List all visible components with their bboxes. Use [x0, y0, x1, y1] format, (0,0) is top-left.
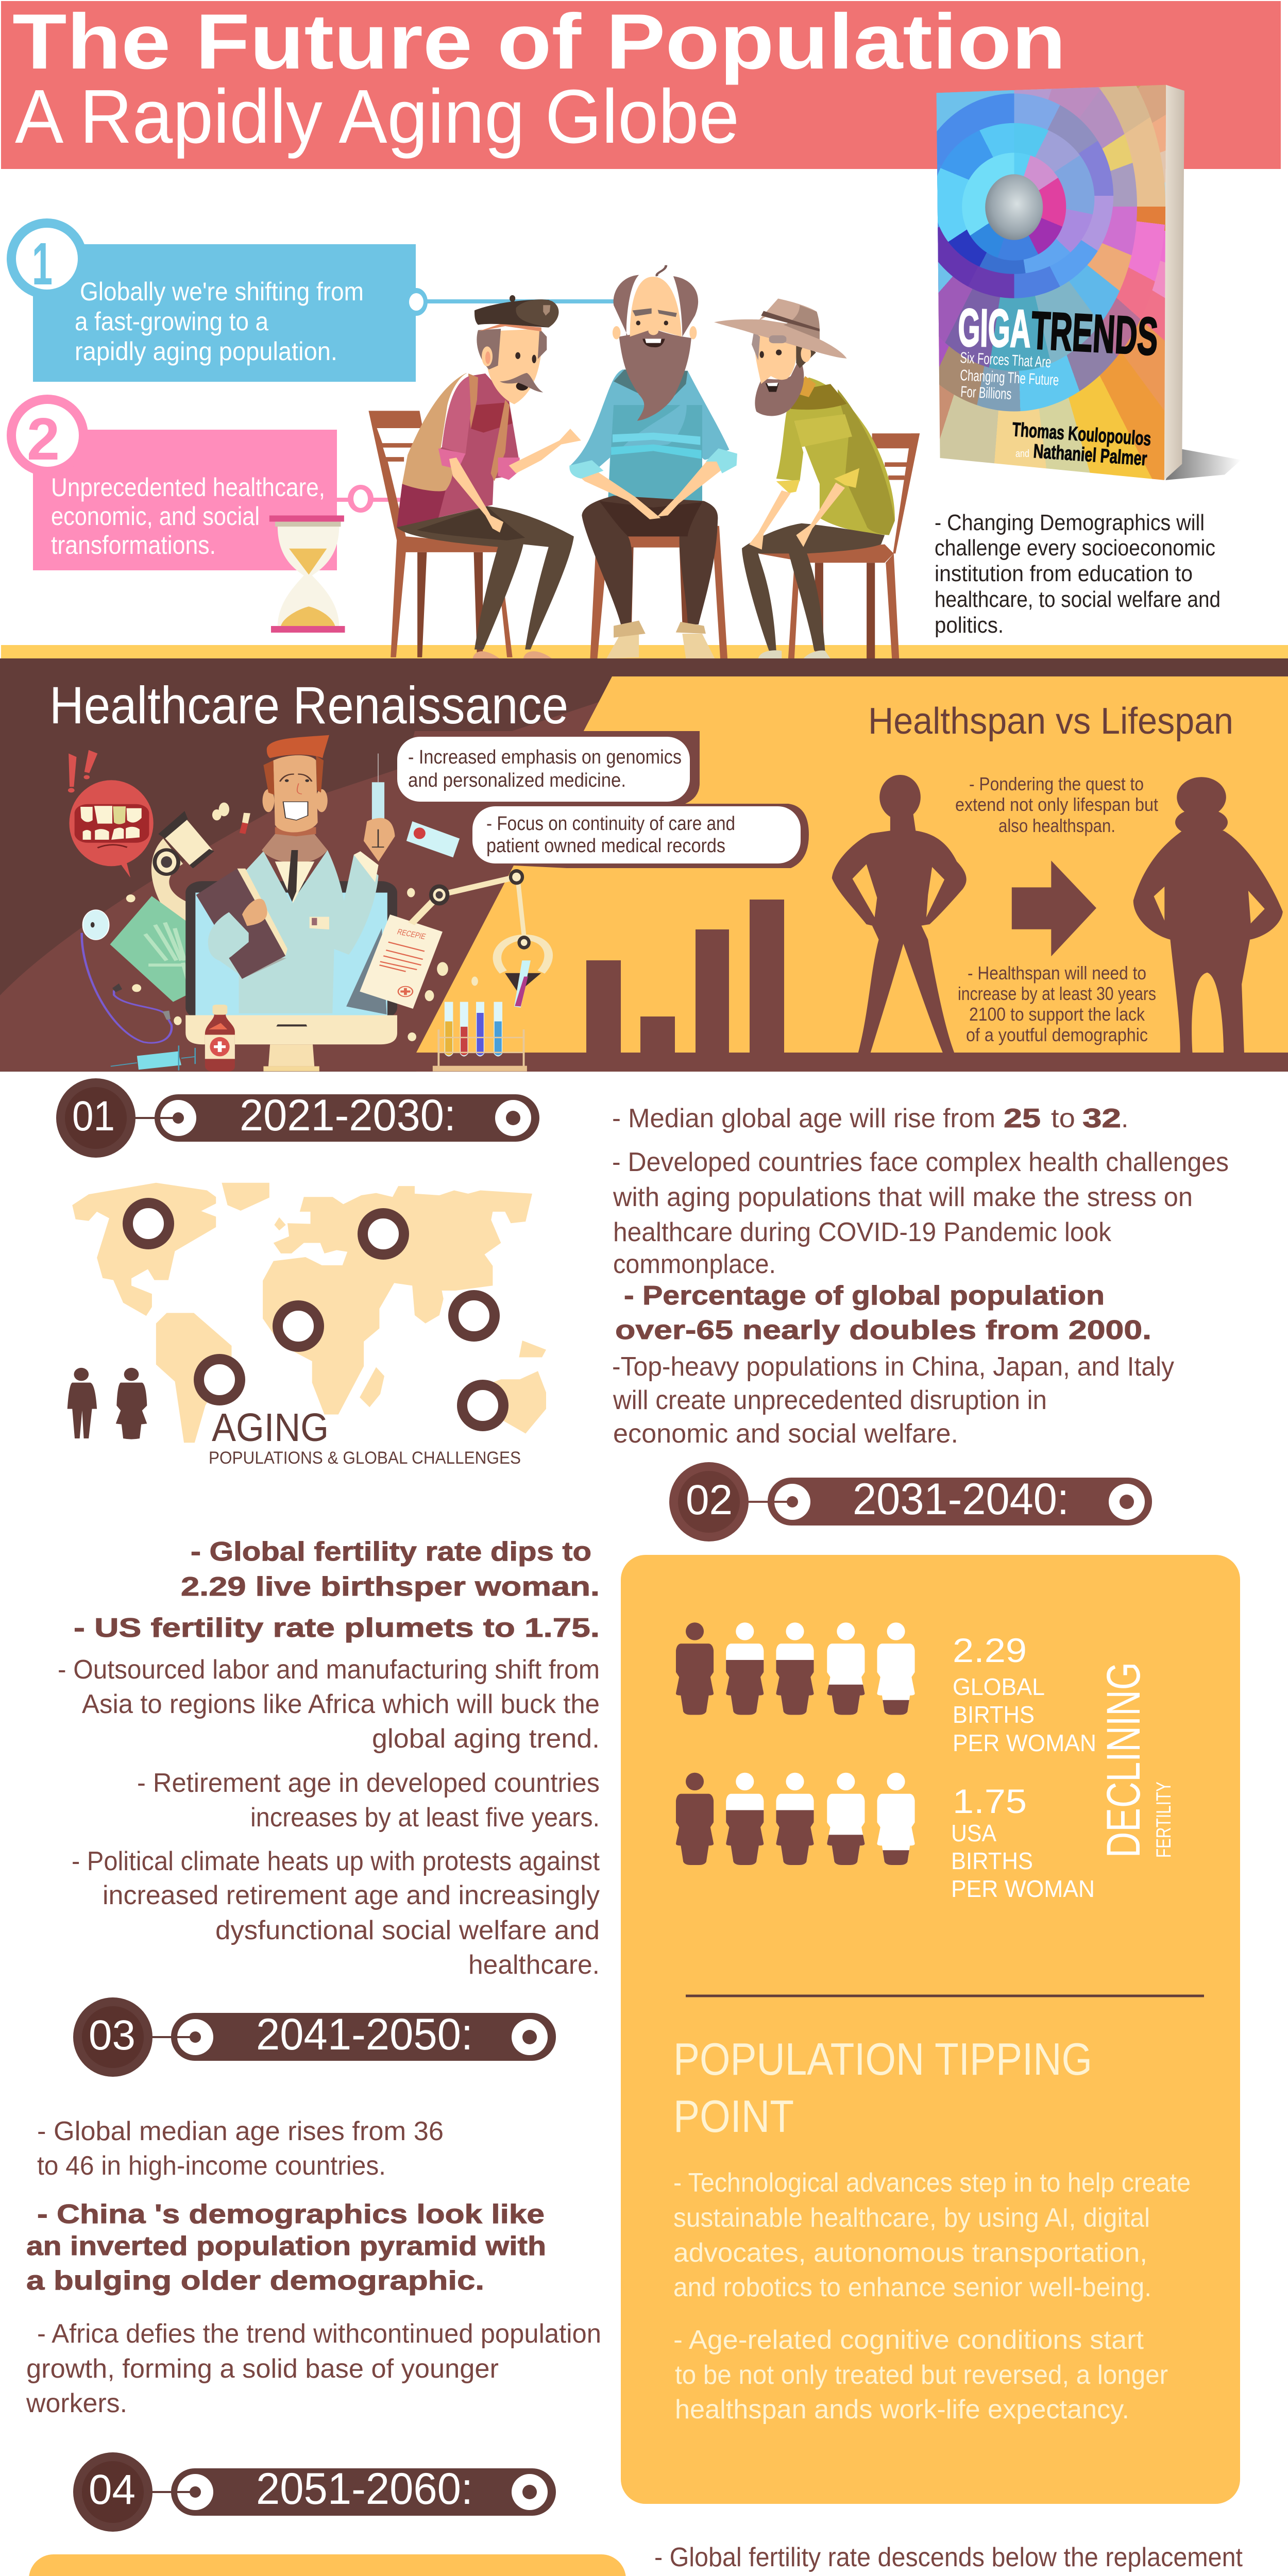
illustration: doctor in monitor [68, 735, 549, 1071]
text block: 2031-2040 [58, 1537, 600, 1980]
header banner [1, 0, 1281, 169]
text block: 2021-2030: commonplace. [613, 1249, 776, 1279]
book title text: Changing The Future [960, 367, 1059, 389]
man with long beard [569, 265, 737, 658]
title: The Future of Population [12, 0, 1066, 86]
icon: prescription paper [360, 914, 443, 1009]
book title text: Thomas Koulopoulos [1011, 419, 1152, 450]
icon: tooth speech bubble [68, 750, 154, 878]
label: aging [209, 1405, 521, 1468]
man with beret [397, 295, 581, 658]
text block: 2021-2030: - Developed countries face complex health challenges [612, 1147, 1229, 1177]
note beside book: healthcare, to social welfare and [935, 587, 1221, 612]
text block: 2041-2050: - Global median age rises from 36 [37, 2116, 444, 2146]
text: tipping point details: advocates, autonomous transportation, [673, 2238, 1147, 2268]
text block: 2031-2040: 2.29 live birthsper woman. [181, 1572, 600, 1602]
text block: 2041-2050: - Africa defies the trend withcontinued population [37, 2319, 601, 2349]
timeline header 02 [669, 1462, 1152, 1541]
book title text: TRENDS [1030, 300, 1160, 366]
text block: 2021-2030: healthcare during COVID-19 Pandemic look [613, 1217, 1112, 1247]
text block: 2021-2030: -Top-heavy populations in China, Japan, and Italy [612, 1352, 1174, 1382]
stat: 2.29 global: GLOBAL [953, 1673, 1045, 1700]
stat: 2.29 global: 2.29 [953, 1631, 1027, 1669]
text block: 2021-2030: 25 [1004, 1104, 1041, 1133]
text block: 2031-2040: - US fertility rate plumets to 1.75. [74, 1613, 600, 1643]
note beside book: politics. [935, 613, 1004, 638]
callout 1: blue: a fast-growing to a [75, 307, 268, 336]
timeline header 01: 01 [72, 1093, 115, 1140]
callout 1: blue: rapidly aging population. [75, 337, 337, 366]
heading: population tipping point [673, 2033, 1092, 2142]
text block: 2031-2040: increases by at least five years. [250, 1803, 600, 1833]
text block: 2041-2050: workers. [26, 2388, 127, 2418]
heading: healthspan vs lifespan: Healthspan vs Lifespan [868, 701, 1233, 742]
note beside book: challenge every socioeconomic [935, 535, 1215, 561]
speech bubble 1: - Increased emphasis on genomics [408, 747, 682, 768]
text block: 2051-2060: - Global fertility rate descends below the replacement [654, 2543, 1243, 2572]
book title text: and [1015, 448, 1029, 460]
text: pondering: extend not only lifespan but [955, 794, 1158, 815]
subtitle: A Rapidly Aging Globe [15, 74, 739, 159]
text block: 2041-2050: to 46 in high-income countries. [37, 2151, 386, 2181]
icon: prescription paper: RECEPIE [396, 927, 427, 941]
callout 2: pink [11, 399, 401, 570]
timeline header 01: 2021-2030: [240, 1091, 456, 1140]
label: aging: POPULATIONS & GLOBAL CHALLENGES [209, 1448, 521, 1468]
text block: 2031-2040: - Global fertility rate dips to [191, 1537, 591, 1567]
icon: pills [126, 803, 478, 1041]
book title text: Nathaniel Palmer [1032, 440, 1148, 470]
timeline header 03: 2041-2050: [256, 2010, 473, 2059]
icon: test tubes [433, 1002, 527, 1071]
timeline header 04 [73, 2452, 556, 2532]
stat: 1.75 usa [951, 1782, 1095, 1902]
text: tipping point details: - Age-related cognitive conditions start [673, 2325, 1144, 2355]
text block: 2021-2030: to [1051, 1104, 1075, 1133]
x-ray [110, 896, 196, 1002]
callout 2: pink: Unprecedented healthcare, [51, 473, 325, 502]
rotated label: fertility: FERTILITY [1153, 1782, 1175, 1858]
speech bubble 1: and personalized medicine. [408, 770, 626, 791]
icon: hourglass [269, 515, 345, 633]
panel: healthcare renaissance [0, 658, 1288, 1072]
text block: 2021-2030: over-65 nearly doubles from 2000. [615, 1315, 1151, 1345]
text: healthspan increase [958, 962, 1156, 1045]
text block: 2031-2040: global aging trend. [372, 1724, 600, 1754]
text block: 2021-2030: economic and social welfare. [613, 1419, 958, 1449]
yellow floor band [1, 645, 1288, 658]
text: healthspan increase: - Healthspan will need to [968, 962, 1146, 984]
callout 1: blue: Globally we're shifting from [80, 277, 364, 306]
note beside book [935, 510, 1221, 638]
note beside book: - Changing Demographics will [935, 510, 1205, 535]
text block: 2031-2040: Asia to regions like Africa which will buck the [82, 1689, 600, 1719]
text: healthspan increase: increase by at least 30 years [958, 983, 1156, 1004]
callout 2: pink: transformations. [51, 531, 216, 560]
left chair [368, 411, 513, 657]
speech bubble 2 [472, 804, 809, 868]
text block: 2021-2030: will create unprecedented disruption in [613, 1385, 1047, 1415]
icon: stethoscope [82, 910, 172, 1043]
text block: 2031-2040: healthcare. [468, 1950, 600, 1980]
text: tipping point details: - Technological advances step in to help create [673, 2168, 1191, 2198]
rotated label: declining: DECLINING [1097, 1662, 1150, 1858]
stat: 2.29 global: BIRTHS [953, 1701, 1035, 1728]
text block: 2041-2050: - China 's demographics look like [37, 2199, 545, 2229]
timeline header 01 [56, 1078, 539, 1158]
text: tipping point details: healthspan ands work-life expectancy. [675, 2395, 1129, 2425]
speech bubble 1 [397, 731, 700, 804]
timeline header 04: 04 [89, 2466, 135, 2513]
stat: 1.75 usa: PER WOMAN [951, 1875, 1095, 1902]
heading: population tipping point: POPULATION TIPPING [673, 2033, 1092, 2084]
book title text [958, 298, 1160, 470]
text block: 2041-2050: an inverted population pyramid with [26, 2231, 546, 2261]
text: tipping point details: and robotics to enhance senior well-being. [673, 2273, 1151, 2302]
man with hat [714, 298, 895, 658]
timeline header 03 [73, 1997, 556, 2077]
icon: syringe [111, 1045, 195, 1071]
silhouettes and arrow [832, 775, 1283, 1053]
text: tipping point details [673, 2168, 1191, 2425]
speech bubble 2: - Focus on continuity of care and [486, 813, 735, 835]
callout 2: pink: economic, and social [51, 502, 260, 531]
speech bubble 2: patient owned medical records [486, 835, 725, 857]
stat: 2.29 global: PER WOMAN [953, 1730, 1096, 1756]
stat: 1.75 usa: BIRTHS [951, 1848, 1033, 1874]
text block: 2041-2050: a bulging older demographic. [26, 2266, 484, 2296]
centre chair [590, 526, 727, 658]
bar chart [586, 900, 784, 1053]
panel: global fertility drops [29, 2554, 626, 2576]
note beside book: institution from education to [935, 561, 1193, 586]
panel: declining fertility and tipping point [621, 1555, 1240, 2504]
monitor [185, 881, 397, 1071]
heading: healthcare renaissance: Healthcare Renaissance [49, 676, 568, 735]
microscope [151, 811, 214, 938]
text block: 2021-2030 [612, 1104, 1229, 1449]
callout 1: blue: 1 [32, 230, 53, 297]
text block: 2041-2050: growth, forming a solid base of younger [26, 2354, 499, 2384]
text block: 2021-2030: - Median global age will rise from [612, 1104, 995, 1133]
icon: medicine bottle [205, 1005, 235, 1071]
book title text: GIGA [958, 298, 1031, 358]
illustration: three elderly men sitting [368, 265, 920, 658]
text block: 2021-2030: 32 [1082, 1104, 1121, 1133]
stat: 1.75 usa: USA [951, 1820, 996, 1846]
pictogram: global births [670, 1622, 921, 1717]
text: healthspan increase: of a youtful demographic [966, 1024, 1148, 1045]
icon: man and woman [67, 1368, 147, 1439]
text: healthspan increase: 2100 to support the lack [969, 1004, 1145, 1025]
stat: 1.75 usa: 1.75 [953, 1782, 1027, 1820]
stat: 2.29 global [953, 1631, 1096, 1756]
timeline header 02: 02 [686, 1477, 733, 1523]
text block: 2021-2030: with aging populations that will make the stress on [613, 1182, 1193, 1212]
timeline header 04: 2051-2060: [256, 2464, 473, 2514]
heading: population tipping point: POINT [673, 2091, 794, 2142]
text block: 2021-2030: - Percentage of global population [624, 1281, 1105, 1311]
timeline header 03: 03 [89, 2012, 135, 2059]
timeline header 02: 2031-2040: [853, 1475, 1069, 1524]
text block: 2041-2050 [26, 2116, 601, 2418]
right chair [758, 433, 920, 658]
callout 1: blue [11, 223, 616, 382]
text block: 2031-2040: dysfunctional social welfare and [215, 1916, 600, 1945]
text block: 2031-2040: - Retirement age in developed countries [137, 1768, 600, 1798]
text block: 2031-2040: - Political climate heats up with protests against [72, 1846, 600, 1876]
icon: blood slide [406, 821, 460, 857]
text: tipping point details: sustainable healthcare, by using AI, digital [673, 2203, 1150, 2233]
callout 2: pink: 2 [27, 405, 60, 472]
text block: 2021-2030: . [1121, 1104, 1128, 1133]
text: tipping point details: to be not only treated but reversed, a longer [675, 2360, 1168, 2390]
text: pondering: also healthspan. [998, 815, 1115, 836]
map markers [128, 1203, 503, 1426]
book cover [917, 77, 1241, 509]
book title text: For Billions [960, 383, 1012, 403]
world map: aging [72, 1183, 546, 1443]
text: pondering [955, 773, 1158, 836]
icon: robotic arm [411, 869, 549, 1008]
label: aging: AGING [212, 1405, 329, 1450]
doctor [196, 735, 395, 1013]
pictogram: usa births [670, 1773, 921, 1867]
text block: 2031-2040: - Outsourced labor and manufacturing shift from [58, 1655, 600, 1685]
text block: 2031-2040: increased retirement age and increasingly [103, 1880, 600, 1910]
text: pondering: - Pondering the quest to [969, 773, 1144, 794]
book cover art [937, 84, 1166, 480]
book title text: Six Forces That Are [960, 349, 1052, 371]
